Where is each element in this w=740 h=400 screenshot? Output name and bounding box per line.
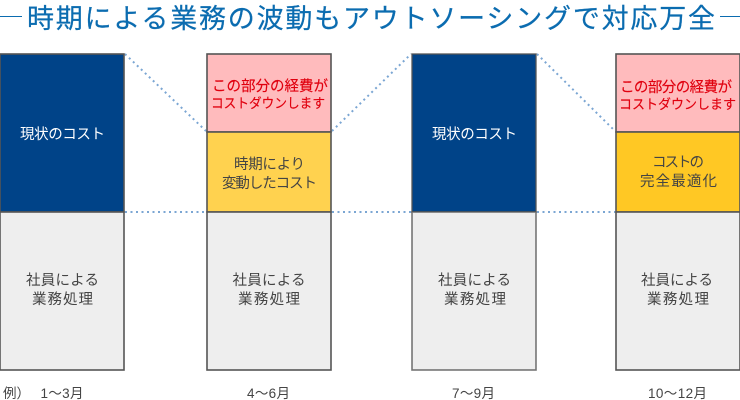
cost reduction block: この部分の経費が (620, 79, 732, 96)
column: 4-6 months (207, 54, 331, 370)
cost reduction block: この部分の経費が (212, 78, 328, 95)
title: 時期による業務の波動もアウトソーシングで対応万全 (27, 4, 715, 34)
column: 1-3 months (0, 54, 124, 370)
dotted connector lines (125, 54, 615, 212)
column: 7-9 months (412, 54, 536, 370)
in-house work block (412, 212, 536, 370)
in-house work block: 社員による (232, 272, 306, 289)
current cost block: 現状のコスト (20, 126, 105, 143)
in-house work block (616, 212, 740, 370)
column: 10-12 months (616, 54, 740, 370)
current cost block (0, 54, 124, 212)
optimized cost block: コストの (652, 155, 704, 171)
variable cost block: 変動したコスト (222, 175, 317, 192)
in-house work block (0, 212, 124, 370)
cost reduction block: コストダウンします (211, 96, 325, 111)
cost reduction block (207, 54, 331, 132)
current cost block (412, 54, 536, 212)
optimized cost block: 完全最適化 (640, 173, 718, 190)
period label: example 1-3 months (3, 386, 84, 400)
cost reduction block (616, 54, 740, 132)
in-house work block: 業務処理 (444, 291, 506, 308)
in-house work block: 業務処理 (32, 291, 94, 308)
in-house work block: 社員による (26, 272, 99, 289)
in-house work block: 業務処理 (647, 291, 710, 308)
variable cost block (207, 132, 331, 212)
in-house work block: 社員による (641, 272, 713, 289)
in-house work block: 社員による (438, 272, 511, 289)
optimized cost block (616, 132, 740, 212)
current cost block: 現状のコスト (432, 126, 517, 143)
variable cost block: 時期により (234, 156, 305, 173)
in-house work block: 業務処理 (238, 291, 300, 308)
in-house work block (207, 212, 331, 370)
cost reduction block: コストダウンします (619, 97, 736, 112)
